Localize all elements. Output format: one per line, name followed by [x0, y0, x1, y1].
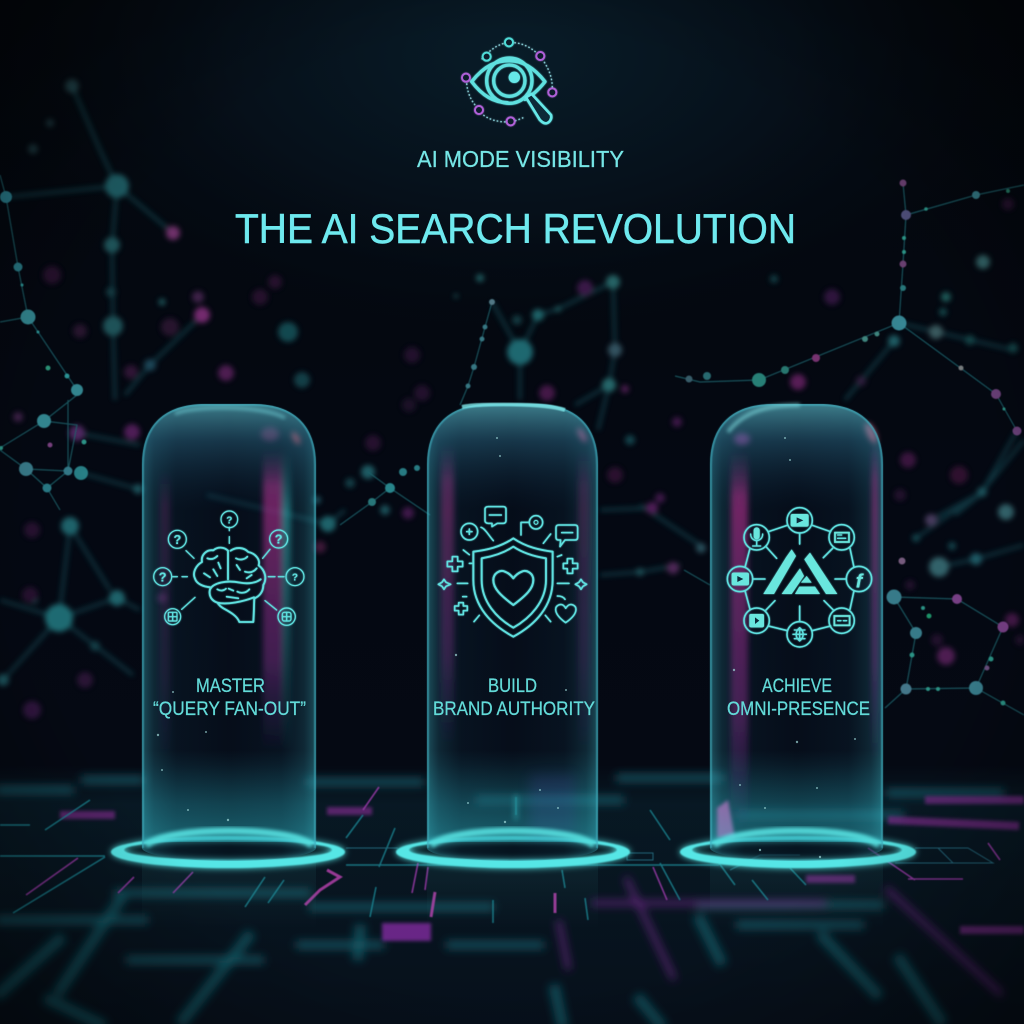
dome shading [142, 404, 316, 510]
glass capsule body [710, 404, 883, 861]
sparkles [438, 557, 587, 615]
floor: blurred purple blocks [60, 800, 1024, 932]
connecting octagon and spokes [745, 525, 854, 631]
glass capsule body [142, 404, 316, 861]
ring interior shade [409, 840, 617, 860]
colour reflections [160, 427, 302, 760]
label [727, 676, 870, 720]
floating particles [733, 437, 856, 858]
center logo [763, 549, 837, 594]
panel: query fan-out capsule [111, 404, 345, 928]
shield inner [482, 547, 546, 628]
violet haze [530, 775, 575, 835]
eye outline [472, 61, 545, 103]
capsule reflection [427, 858, 598, 928]
iris ring [487, 58, 532, 103]
capsule outline [711, 405, 882, 848]
pink glass reflection [717, 800, 735, 838]
colour reflections [441, 427, 590, 820]
label: BUILD [488, 676, 537, 697]
speech bubbles [485, 507, 578, 547]
question marks: ? [275, 533, 283, 547]
question marks: ? [292, 573, 298, 584]
network: in-focus nodes and links [0, 175, 1024, 715]
floating particles [157, 691, 229, 821]
colour reflections [731, 421, 879, 830]
label [153, 676, 306, 720]
small badges [457, 522, 569, 622]
query nodes [154, 511, 304, 625]
glowing base ring [396, 836, 630, 868]
question marks: ? [226, 515, 232, 526]
orbit nodes [462, 38, 556, 125]
icon: brand logo with channel network [727, 508, 872, 647]
capsule reflection [142, 858, 316, 928]
brain outline [194, 548, 265, 622]
question marks: ? [173, 533, 181, 547]
base inner glow [711, 750, 882, 842]
icon: shield with heart [438, 507, 587, 637]
label: BRAND AUTHORITY [433, 699, 595, 720]
base inner glow [143, 750, 315, 842]
shield outer [473, 538, 553, 637]
panel: omni-presence capsule [680, 404, 916, 928]
channel glyphs [732, 514, 865, 627]
small heart [556, 605, 576, 623]
magnifier handle [526, 94, 551, 123]
label: OMNI-PRESENCE [727, 699, 870, 720]
heart [493, 571, 533, 605]
glowing base ring [680, 836, 916, 868]
dome shading [710, 404, 883, 510]
dome shading [427, 404, 598, 510]
capsule outline [428, 405, 597, 848]
channel nodes [727, 508, 872, 647]
question marks [159, 515, 298, 584]
floor: sharp purple traces [26, 787, 1000, 917]
subtitle: AI MODE VISIBILITY [417, 146, 624, 172]
ring interior shade [692, 840, 902, 860]
capsule reflection [710, 858, 883, 928]
glowing base ring [111, 836, 345, 868]
question marks: ? [159, 570, 167, 584]
base inner glow [428, 750, 597, 842]
pupil [509, 72, 520, 83]
capsule outline [143, 405, 315, 848]
label [433, 676, 595, 720]
channel glyphs: f [856, 571, 865, 592]
glass capsule body [427, 404, 598, 861]
floor: sharp teal traces [0, 797, 993, 923]
icon: brain with query nodes [154, 511, 304, 625]
icon: eye with magnifying glass and orbit of nodes [462, 38, 556, 125]
floor: blurred far and near bands [0, 778, 1000, 1024]
floor: circuit board traces [0, 765, 1024, 1024]
panel: brand authority capsule [396, 404, 630, 928]
ring interior shade [124, 840, 332, 860]
network: dim out-of-focus background nodes and links [0, 79, 1024, 719]
label: MASTER [196, 676, 265, 697]
title: THE AI SEARCH REVOLUTION [235, 205, 796, 252]
label: ACHIEVE [762, 676, 832, 697]
floating particles [455, 437, 567, 823]
orbit dotted ring [467, 43, 552, 122]
label: “QUERY FAN-OUT” [153, 699, 306, 720]
query rays [173, 527, 284, 610]
brain folds [204, 556, 257, 598]
